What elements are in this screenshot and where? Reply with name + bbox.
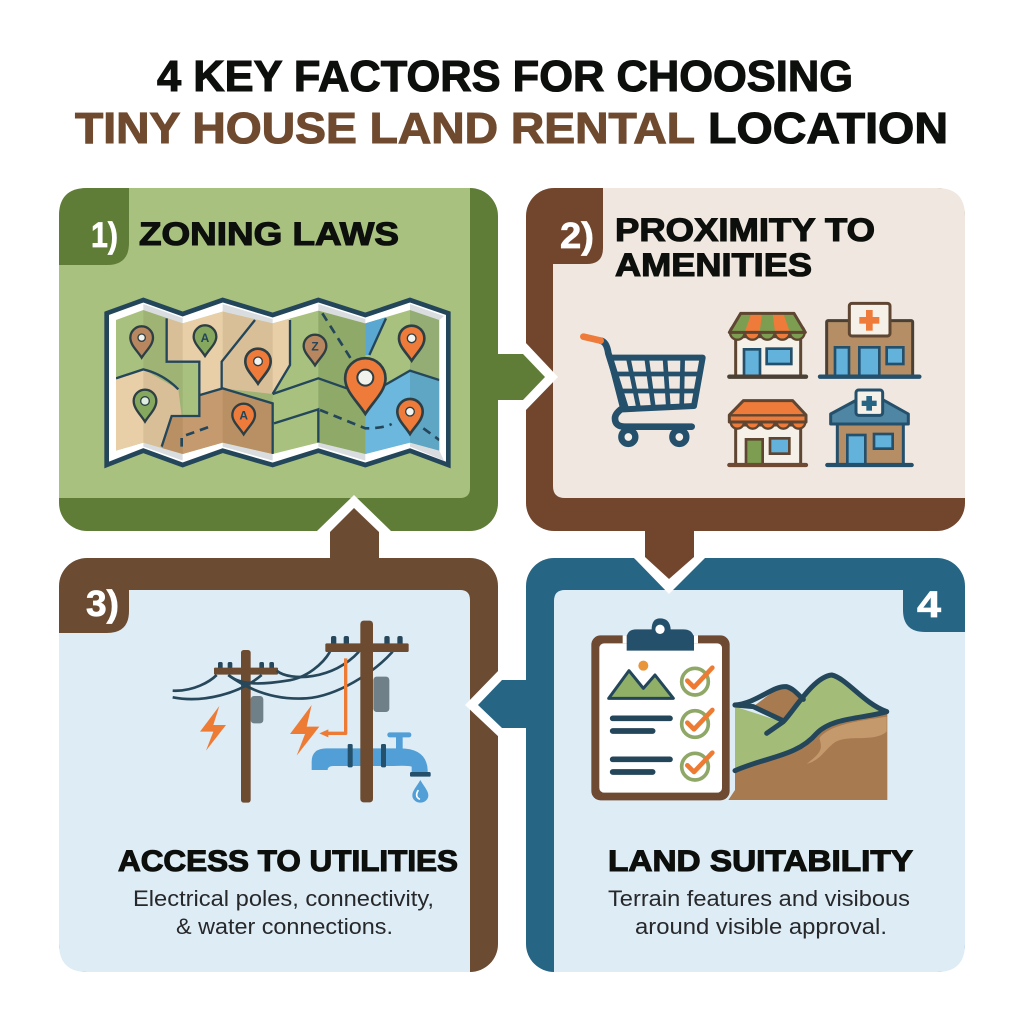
icon: clinic with blue cross	[827, 390, 912, 465]
arrow: panel 3 to panel 1	[317, 495, 391, 558]
title: 4 KEY FACTORS FOR CHOOSING	[157, 52, 853, 101]
arrow: panel 1 to panel 2	[498, 342, 558, 411]
title: LOCATION	[708, 104, 948, 153]
icon: shopping cart	[583, 303, 919, 465]
icon: clinic with orange cross	[820, 303, 919, 377]
panel: access to utilities: 3)	[86, 583, 119, 624]
panel: zoning laws: ZONING LAWS	[139, 216, 399, 252]
icon: folded zoning map: Z	[311, 340, 319, 354]
panel: access to utilities: ACCESS TO UTILITIES	[118, 845, 458, 878]
title	[75, 52, 948, 153]
title: TINY HOUSE LAND RENTAL	[75, 104, 695, 153]
icon: power poles and water tap	[173, 621, 431, 803]
panel: zoning laws	[59, 188, 498, 531]
icon: folded zoning map: A	[201, 331, 210, 345]
panel: land suitability	[526, 558, 965, 972]
icon: folded zoning map	[107, 300, 448, 465]
arrow: panel 2 to panel 4	[633, 531, 706, 594]
panel: proximity to amenities: AMENITIES	[615, 247, 812, 283]
icon: folded zoning map: A	[239, 408, 248, 422]
panel: proximity to amenities: PROXIMITY TO	[615, 212, 875, 248]
panel: zoning laws: 1)	[91, 216, 118, 255]
water pipe and tap	[312, 732, 431, 803]
panel: access to utilities	[59, 558, 498, 972]
panel: land suitability: 4	[917, 584, 941, 625]
panel: access to utilities: Electrical poles, connectivity,	[133, 886, 434, 911]
terrain	[728, 675, 887, 800]
panel: land suitability: around visible approval.	[635, 914, 887, 939]
arrow: panel 4 to panel 3	[465, 669, 526, 738]
panel: land suitability: LAND SUITABILITY	[608, 845, 913, 878]
panel: proximity to amenities	[526, 188, 965, 531]
icon: striped awning store	[729, 313, 806, 377]
pin markers	[130, 325, 424, 434]
panel: land suitability: Terrain features and visibous	[608, 886, 910, 911]
icon: terrain and checklist clipboard	[591, 618, 887, 800]
panel: proximity to amenities: 2)	[560, 215, 594, 256]
panel: access to utilities: & water connections.	[176, 914, 393, 939]
icon: orange awning store	[729, 401, 806, 465]
